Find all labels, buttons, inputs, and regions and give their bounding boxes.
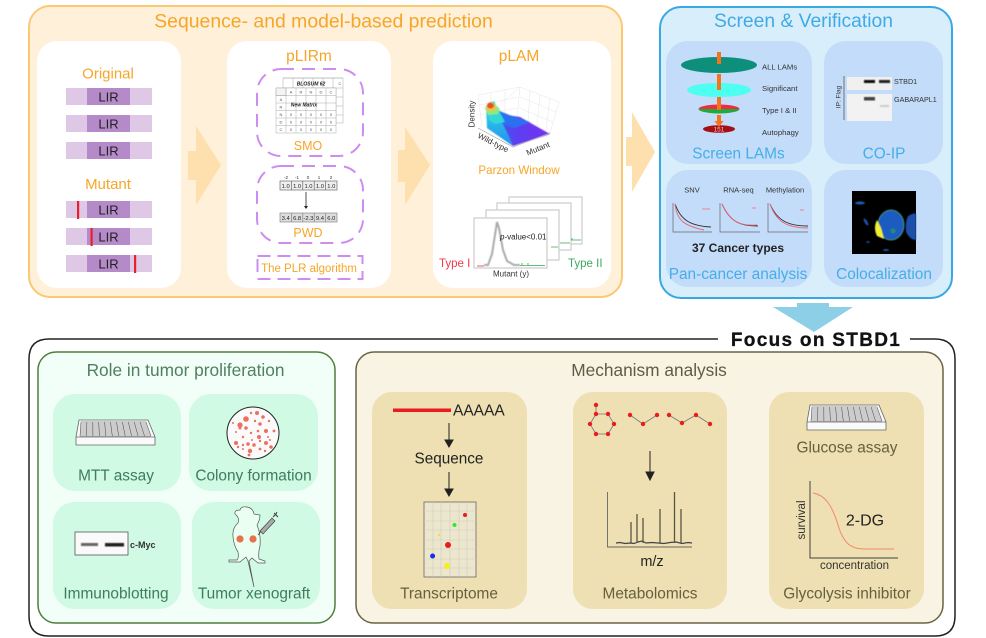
position labels: 2 <box>330 175 333 180</box>
stacked density charts <box>474 197 582 278</box>
mutant LIR bars: LIR <box>98 202 119 218</box>
matrix labels: A <box>280 97 283 102</box>
matrix labels: C <box>339 81 342 86</box>
weight row before <box>280 181 337 190</box>
axis label: wild-type: Wild-type <box>476 131 511 155</box>
matrix labels: 0 <box>310 120 313 124</box>
mRNA: AAAAA <box>453 402 505 420</box>
mutant LIR bars <box>66 201 152 273</box>
funnel labels: Type I & II <box>762 106 797 115</box>
matrix labels: C <box>280 127 283 132</box>
PLR algorithm <box>258 256 362 279</box>
matrix titles <box>291 82 326 108</box>
PLR algorithm: The PLR algorithm <box>261 263 357 275</box>
label: PWD: PWD <box>293 226 323 240</box>
heading: pLIRm: pLIRm <box>286 48 332 65</box>
position labels: -2 <box>284 175 288 180</box>
chart titles: RNA-seq <box>723 186 754 194</box>
heading: screen & verification: Screen & Verification <box>714 11 893 32</box>
blot: IP: Flag <box>836 85 842 108</box>
label: tumor xenograft: Tumor xenograft <box>198 586 311 602</box>
weight row after: 9.4 <box>316 216 325 222</box>
label: SMO: SMO <box>294 139 323 153</box>
chart titles: Methylation <box>766 186 804 194</box>
blot: GABARAPL1 <box>894 95 937 104</box>
original LIR bars: LIR <box>98 90 119 104</box>
matrix labels: 0 <box>300 127 303 132</box>
matrix labels: A <box>290 90 293 94</box>
icon: well plate <box>807 405 886 430</box>
label: original: Original <box>82 66 134 82</box>
matrix labels <box>280 81 342 132</box>
card: tumor xenograft <box>192 502 320 609</box>
matrix labels: N <box>280 112 283 117</box>
funnel labels <box>762 62 799 137</box>
icon: mouse with syringe <box>229 507 278 587</box>
heading: pLAM: pLAM <box>499 48 539 65</box>
matrix labels: 0 <box>300 120 303 124</box>
matrix labels: 0 <box>290 120 293 124</box>
matrix labels: 0 <box>290 112 293 117</box>
card: metabolomics <box>573 392 727 609</box>
matrix labels: N <box>310 90 313 94</box>
axis label: mutant: Mutant <box>525 140 552 157</box>
position labels: 1 <box>318 175 321 180</box>
panel: sequence- and model-based prediction <box>29 6 622 297</box>
matrix labels: D <box>280 120 283 124</box>
mass spectrum <box>608 492 692 570</box>
arrow: weight transform <box>305 192 307 206</box>
card: glycolysis <box>769 392 924 609</box>
matrix titles: BLOSUM 62 <box>297 82 326 88</box>
original LIR bars <box>66 88 152 159</box>
panel: pLIRm <box>227 41 391 288</box>
weight row after: 6.8 <box>293 216 301 222</box>
label: 37 cancer types: 37 Cancer types <box>692 241 784 255</box>
icon: well plate <box>76 420 155 445</box>
card: colocalization <box>824 170 943 287</box>
panel: focus on STBD1 <box>29 330 955 636</box>
matrix labels: 0 <box>330 112 333 117</box>
weight row after: -2.3 <box>304 216 314 222</box>
label: sequence: Sequence <box>415 450 483 468</box>
western blot: c-Myc <box>130 540 156 550</box>
mRNA <box>393 402 505 420</box>
chart titles: SNV <box>684 186 700 194</box>
dose response chart <box>796 481 898 572</box>
position labels <box>284 175 333 180</box>
mutant LIR bars: LIR <box>98 230 119 244</box>
label: Type II: Type II <box>568 258 603 270</box>
microarray <box>424 502 476 577</box>
original LIR bars: LIR <box>98 144 119 158</box>
matrix labels: 0 <box>320 127 323 132</box>
label: pan-cancer analysis: Pan-cancer analysis <box>669 266 808 283</box>
card: immunoblotting <box>53 502 181 609</box>
matrix labels: 0 <box>330 120 333 124</box>
dose response chart: 2-DG <box>846 512 884 530</box>
matrix labels: 0 <box>320 112 323 117</box>
matrix labels: 0 <box>320 120 323 124</box>
weight row before: 1.0 <box>327 184 335 190</box>
label: transcriptome: Transcriptome <box>400 586 498 602</box>
card: transcriptome <box>372 392 527 609</box>
arrow head <box>304 206 308 209</box>
position labels: -1 <box>295 175 299 180</box>
blot: STBD1 <box>894 77 917 86</box>
funnel labels: Significant <box>762 84 798 93</box>
card: colony formation <box>189 394 318 491</box>
chart titles <box>684 186 804 194</box>
arrow: to spectrum <box>646 451 654 480</box>
arrow: to sequence <box>445 423 453 447</box>
mutant LIR bars: LIR <box>98 256 119 272</box>
funnel <box>681 52 757 134</box>
matrix titles: New Matrix <box>291 102 317 108</box>
molecules <box>588 403 712 436</box>
card: screen LAMs <box>666 41 812 164</box>
card: MTT assay <box>53 394 181 491</box>
heading: mechanism analysis: Mechanism analysis <box>571 360 727 380</box>
survival curves <box>673 203 808 232</box>
arrow: to microarray <box>445 472 453 496</box>
microscopy image <box>852 191 916 254</box>
blot <box>836 76 937 121</box>
label: MTT assay: MTT assay <box>78 468 154 484</box>
weight row before: 1.0 <box>282 184 290 190</box>
label: immunoblotting: Immunoblotting <box>63 586 169 602</box>
weight row after <box>280 213 337 222</box>
label: Parzon Window: Parzon Window <box>478 164 560 177</box>
funnel: 151 <box>714 126 725 134</box>
weight row after: 6.0 <box>327 216 335 222</box>
arrow: to pLAM <box>398 127 430 205</box>
weight row after: 3.4 <box>282 216 291 222</box>
SMO group <box>257 69 363 156</box>
panel: pLAM <box>433 41 611 288</box>
label: metabolomics: Metabolomics <box>603 586 698 602</box>
funnel labels: Autophagy <box>762 128 799 137</box>
panel: original and mutant <box>37 41 181 288</box>
label: colony formation: Colony formation <box>195 468 312 484</box>
axis label: m/z: m/z <box>640 554 664 570</box>
axis label: density: Density <box>468 101 476 127</box>
panel: mechanism analysis <box>356 352 943 623</box>
dose response chart: survival <box>796 501 808 539</box>
card: pan-cancer analysis <box>666 170 812 287</box>
panel: screen and verification <box>660 7 952 298</box>
matrix labels: R <box>300 90 303 94</box>
position labels: 0 <box>307 175 310 180</box>
panel: role in tumor proliferation <box>38 352 335 623</box>
label: screen LAMs: Screen LAMs <box>692 146 785 162</box>
matrix labels: 0 <box>310 127 313 132</box>
matrix labels: D <box>320 90 323 94</box>
weight row before: 1.0 <box>293 184 301 190</box>
heading: focus on STBD1: Focus on STBD1 <box>731 330 901 351</box>
label: colocalization: Colocalization <box>836 266 932 283</box>
icon: colony dish <box>227 407 279 459</box>
arrow: to screen and verification <box>626 112 655 192</box>
matrix labels: C <box>330 90 333 94</box>
weight row before: 1.0 <box>304 184 313 190</box>
matrix labels: R <box>280 104 283 110</box>
label: glycolysis inhibitor: Glycolysis inhibitor <box>783 586 911 602</box>
axis label: mutant y: Mutant (y) <box>493 270 529 278</box>
matrix labels: 0 <box>300 112 303 117</box>
heading: sequence prediction: Sequence- and model-based prediction <box>154 10 493 32</box>
PWD group <box>257 166 363 243</box>
heading: role in tumor proliferation: Role in tumor proliferation <box>87 360 284 380</box>
matrix labels: 0 <box>290 127 293 132</box>
arrow: to pLIRm <box>188 126 221 205</box>
weight row before: 1.0 <box>316 184 324 190</box>
label: CO-IP: CO-IP <box>863 146 905 162</box>
original LIR bars: LIR <box>98 116 119 132</box>
label: Type I: Type I <box>439 258 470 270</box>
label: mutant: Mutant <box>85 176 132 193</box>
matrix labels: 0 <box>330 127 333 132</box>
p-value: p-value<0.01 <box>499 232 547 242</box>
card: CO-IP <box>824 41 943 164</box>
funnel labels: ALL LAMs <box>762 62 797 72</box>
label: glucose assay: Glucose assay <box>797 440 898 456</box>
arrow: focus <box>773 303 853 332</box>
matrix tables <box>276 78 343 133</box>
dose response chart: concentration <box>820 560 889 572</box>
matrix labels: 0 <box>310 112 313 117</box>
3D density plot <box>468 87 559 157</box>
